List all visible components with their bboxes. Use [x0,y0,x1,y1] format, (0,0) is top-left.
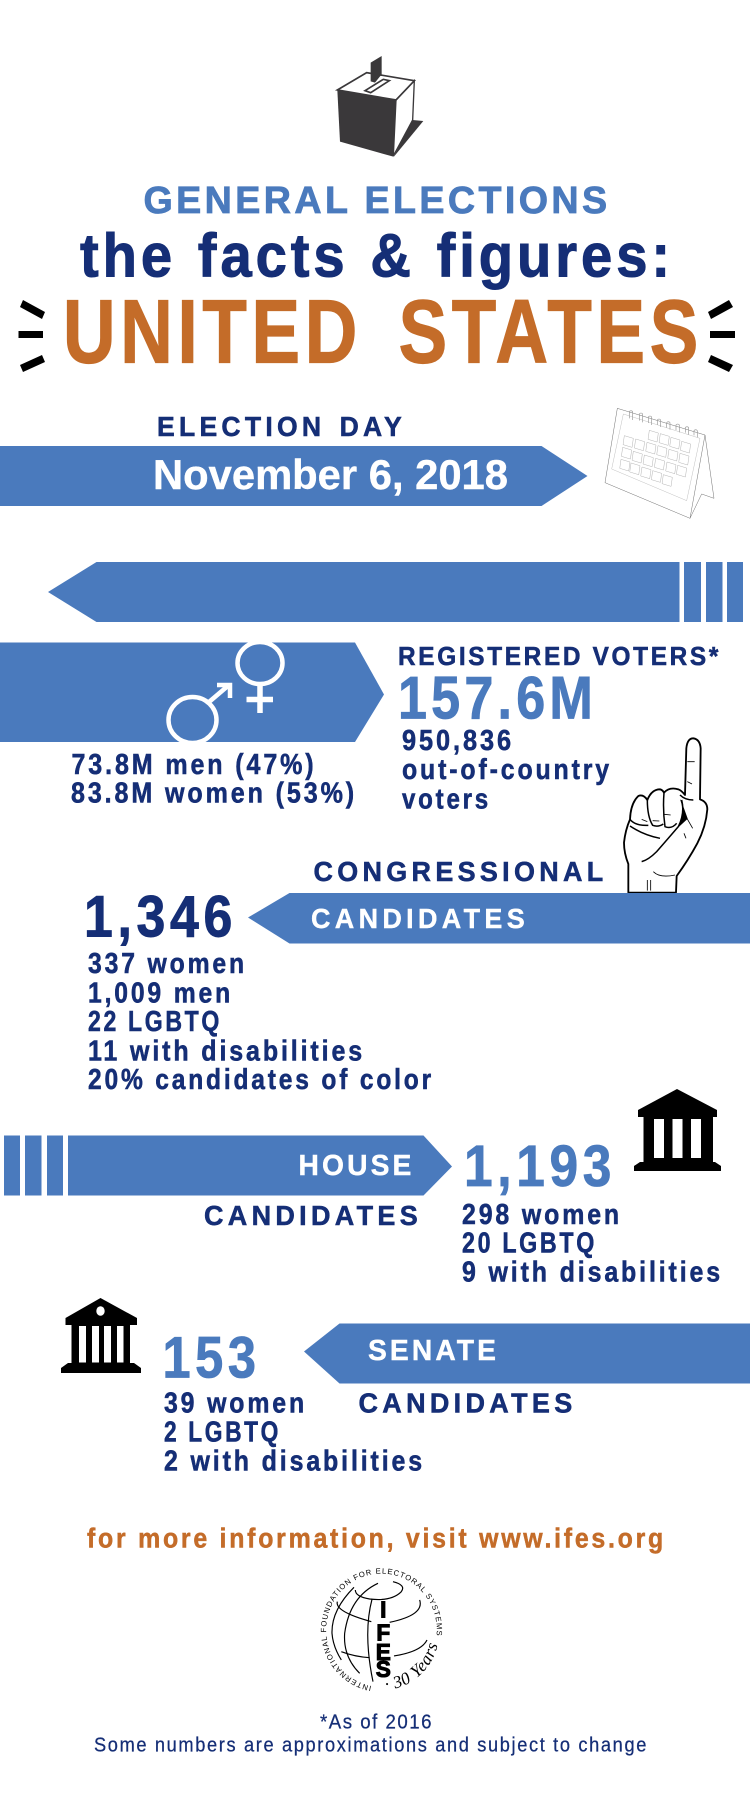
label: senate: SENATE [368,1335,499,1367]
gender breakdown text: 83.8M women (53%) [71,778,357,810]
senate candidate breakdown: 39 women [164,1388,307,1420]
label: house candidates: CANDIDATES [204,1200,422,1231]
footnote [94,1712,648,1756]
heading: general elections: GENERAL ELECTIONS [144,180,610,222]
arrow band: registered voters [0,642,384,742]
congressional candidate breakdown [88,948,434,1096]
gender breakdown text: 73.8M men (47%) [72,749,316,781]
senate candidate breakdown: 2 LGBTQ [164,1416,281,1448]
logo: IFES globe: INTERNATIONAL FOUNDATION FOR ELECTORAL SYSTEMS [320,1568,442,1691]
arrow band: congressional candidates [248,893,750,944]
logo: IFES globe: I [380,1596,386,1622]
out-of-country voters text [402,725,612,816]
congressional candidate breakdown: 20% candidates of color [88,1064,434,1096]
number: registered voters: 157.6M [398,664,597,732]
heading: election day: ELECTION DAY [157,411,406,442]
call to action: more information: for more information, visit www.ifes.org [87,1522,666,1554]
house candidate breakdown: 20 LGBTQ [462,1228,597,1260]
congressional candidate breakdown: 11 with disabilities [88,1036,365,1068]
label: house: HOUSE [298,1150,414,1182]
icon: gender symbols [168,642,282,743]
arrow band: left pointing pencil with stripes [48,562,743,622]
congressional candidate breakdown: 1,009 men [88,978,233,1010]
gender breakdown text [71,749,357,810]
heading: congressional: CONGRESSIONAL [314,856,608,887]
arrow band: house with stripes [4,1136,452,1196]
icon: capitol building senate [61,1298,141,1373]
arrow band: senate [304,1324,750,1384]
house candidate breakdown: 298 women [462,1199,622,1231]
heading: registered voters: REGISTERED VOTERS* [398,641,721,671]
congressional candidate breakdown: 337 women [88,948,247,980]
logo: IFES globe: E [376,1639,391,1665]
decoration: right emphasis ticks [708,300,735,372]
number: house candidates: 1,193 [464,1134,616,1199]
logo: IFES globe: F [376,1619,390,1645]
label: senate candidates: CANDIDATES [358,1388,576,1418]
icon: desk calendar [605,408,714,518]
label: candidates: CANDIDATES [311,903,529,934]
senate candidate breakdown [164,1388,425,1478]
decoration: left emphasis ticks [18,300,45,372]
number: senate candidates: 153 [162,1326,260,1390]
out-of-country voters text: voters [402,784,491,816]
arrow band: election day [0,446,588,506]
footnote: Some numbers are approximations and subject to change [94,1734,648,1756]
congressional candidate breakdown: 22 LGBTQ [88,1006,222,1038]
logo: IFES globe: S [376,1656,391,1682]
house candidate breakdown [462,1199,723,1288]
out-of-country voters text: out-of-country [402,754,612,786]
election date: November 6, 2018 [153,451,508,498]
senate candidate breakdown: 2 with disabilities [164,1446,425,1478]
number: congressional candidates: 1,346 [84,884,237,950]
out-of-country voters text: 950,836 [402,725,514,757]
icon: capitol building house [634,1089,721,1171]
footnote: *As of 2016 [320,1712,433,1734]
heading: the facts and figures: the facts & figures: [80,222,674,290]
icon: ballot box [337,56,423,157]
logo: IFES globe: · 30 Years · [386,1643,438,1688]
icon: hand pointing up [624,738,707,893]
